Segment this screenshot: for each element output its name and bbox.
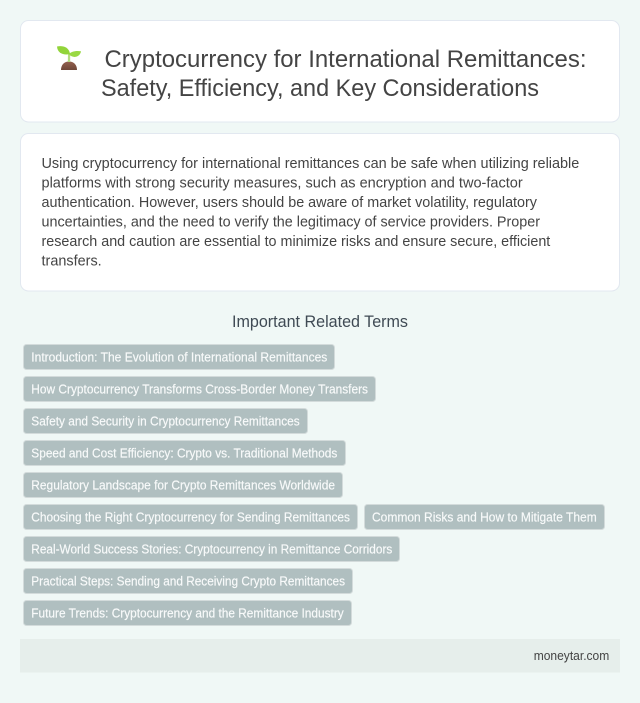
tag: how cryptocurrency transforms: How Cryptocurrency Transforms Cross-Border Money Transfers: [31, 381, 368, 396]
tag: speed and cost: Speed and Cost Efficiency: Crypto vs. Traditional Methods: [31, 445, 337, 460]
tag: choosing the right cryptocurrency: [24, 504, 358, 530]
tag: introduction: Introduction: The Evolution of International Remittances: [31, 349, 327, 364]
footer: [20, 639, 620, 672]
footer text: source: moneytar.com: [534, 648, 609, 663]
panel: description: [20, 134, 620, 291]
tag: future trends: Future Trends: Cryptocurrency and the Remittance Industry: [31, 605, 344, 620]
tag: practical steps: Practical Steps: Sending and Receiving Crypto Remittances: [31, 573, 345, 588]
title panel: [20, 20, 620, 122]
tag: safety and security: Safety and Security in Cryptocurrency Remittances: [31, 413, 300, 428]
tag: regulatory landscape: [24, 472, 342, 498]
tag: future trends: [24, 600, 352, 626]
tag: safety and security: [24, 408, 308, 434]
tag: introduction: [24, 344, 334, 370]
tag: how cryptocurrency transforms: [24, 376, 376, 402]
tag list: [24, 344, 604, 626]
tag: practical steps: [24, 568, 352, 594]
title text: Safety, Efficiency, and Key Considerations: [101, 75, 539, 102]
tag: real-world success stories: [24, 536, 400, 562]
tag: choosing the right cryptocurrency: Choosing the Right Cryptocurrency for Sending Remittances: [31, 509, 350, 524]
tag: speed and cost: [24, 440, 346, 466]
description text: transfers.: [42, 254, 102, 270]
icon: sprout: [57, 46, 81, 70]
title text: Cryptocurrency for International Remittances:: [104, 46, 586, 73]
title text: [101, 46, 586, 102]
tag: real-world success stories: Real-World Success Stories: Cryptocurrency in Remittance Corridors: [31, 541, 392, 556]
description text: platforms with strong security measures, such as encryption and two-factor: [42, 176, 523, 192]
tag: regulatory landscape: Regulatory Landscape for Crypto Remittances Worldwide: [31, 477, 335, 492]
description text: authentication. However, users should be aware of market volatility, regulatory: [42, 195, 538, 211]
tag: common risks: Common Risks and How to Mitigate Them: [372, 509, 597, 524]
tag: common risks: [364, 504, 604, 530]
description text: [42, 156, 579, 270]
heading: important related terms: Important Related Terms: [232, 313, 408, 331]
description text: research and caution are essential to minimize risks and ensure secure, efficient: [42, 234, 551, 250]
description text: uncertainties, and the need to verify the legitimacy of service providers. Proper: [42, 214, 540, 230]
description text: Using cryptocurrency for international remittances can be safe when utilizing reliable: [42, 156, 579, 172]
